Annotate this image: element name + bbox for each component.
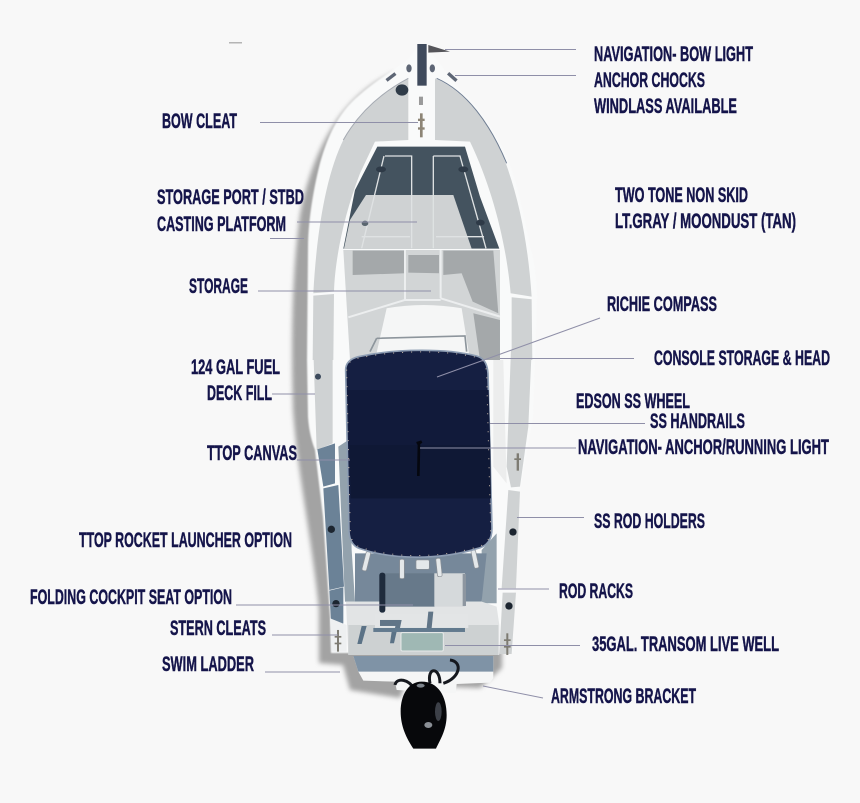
outboard engine [401, 682, 447, 749]
label: deck fill: DECK FILL [207, 382, 272, 405]
rod holders and deck fill [315, 374, 517, 610]
aft cockpit and transom [313, 350, 532, 749]
hull outline [307, 48, 537, 653]
boat top view [292, 44, 537, 749]
storage floor [343, 250, 500, 360]
starboard side deck lower [512, 297, 532, 360]
label: storage port and starboard: STORAGE PORT / STBD [157, 186, 304, 209]
windshield rail [370, 336, 467, 352]
canvas panel bands [348, 390, 490, 445]
port side deck [313, 350, 333, 450]
console side [493, 360, 507, 483]
platform hatch lines [362, 156, 486, 248]
label: ttop canvas: TTOP CANVAS [207, 442, 297, 465]
hull shadow [292, 72, 502, 698]
label: rocket launcher: TTOP ROCKET LAUNCHER OPTION [79, 529, 292, 552]
starboard side deck [507, 350, 532, 487]
cockpit sole [346, 602, 499, 655]
label: ss rod holders: SS ROD HOLDERS [594, 510, 705, 533]
engine cables [395, 660, 458, 688]
casting platform sunlit [344, 195, 472, 249]
label: anchor chocks: ANCHOR CHOCKS [594, 69, 705, 92]
canvas snaps [347, 352, 491, 556]
console front [375, 305, 470, 360]
label: two tone non skid: TWO TONE NON SKID [615, 184, 748, 207]
storage floor shadow [353, 251, 500, 360]
label: edson wheel: EDSON SS WHEEL [576, 390, 690, 413]
t-top canvas [346, 350, 492, 557]
swim platform shade [353, 656, 493, 672]
label: casting platform: CASTING PLATFORM [157, 213, 286, 236]
anchor chocks [385, 64, 458, 82]
label: navigation bow light: NAVIGATION- BOW LIGHT [594, 43, 753, 66]
port deck non skid [313, 78, 408, 293]
label: fuel capacity: 124 GAL FUEL [191, 356, 280, 379]
port aft coaming in shade [317, 443, 344, 633]
label: swim ladder: SWIM LADDER [162, 653, 254, 676]
label: windlass available: WINDLASS AVAILABLE [594, 95, 737, 118]
rocket launcher rods [362, 550, 479, 579]
label: storage: STORAGE [189, 275, 248, 298]
bow light [428, 45, 450, 53]
platform hatch handles [376, 166, 386, 172]
stern corner [330, 618, 347, 652]
cockpit shade [338, 440, 497, 603]
label: rod racks [498, 580, 633, 603]
swim platform [353, 656, 493, 693]
folding seat [373, 573, 468, 632]
cockpit sole sun band [348, 625, 498, 655]
bow pulpit [417, 44, 427, 86]
anchor locker [396, 84, 408, 96]
under canvas cockpit [355, 553, 487, 602]
label: armstrong bracket: ARMSTRONG BRACKET [551, 685, 696, 708]
canvas center strap [417, 442, 422, 476]
stern cleats [335, 453, 521, 655]
faint mark [229, 42, 242, 44]
label: richie compass [437, 293, 717, 377]
label: bow cleat: BOW CLEAT [162, 110, 237, 133]
transom live well [401, 633, 443, 651]
port side deck lower [313, 294, 334, 360]
casting platform dark [343, 147, 499, 249]
label: richie compass: RICHIE COMPASS [607, 293, 717, 316]
label: ss handrails: SS HANDRAILS [650, 410, 745, 433]
starboard deck non skid [435, 78, 532, 297]
label: rod racks: ROD RACKS [559, 580, 633, 603]
starboard edge line [437, 78, 507, 163]
label: armstrong bracket [483, 685, 696, 708]
label: folding seat: FOLDING COCKPIT SEAT OPTION [30, 586, 232, 609]
port edge line [343, 78, 408, 140]
bow and forward deck [313, 44, 532, 360]
bow cleat [418, 97, 425, 137]
label: stern cleats: STERN CLEATS [170, 617, 266, 640]
starboard aft coaming [499, 490, 520, 654]
storage hatch lines [348, 250, 500, 317]
shadow strips [357, 626, 397, 644]
